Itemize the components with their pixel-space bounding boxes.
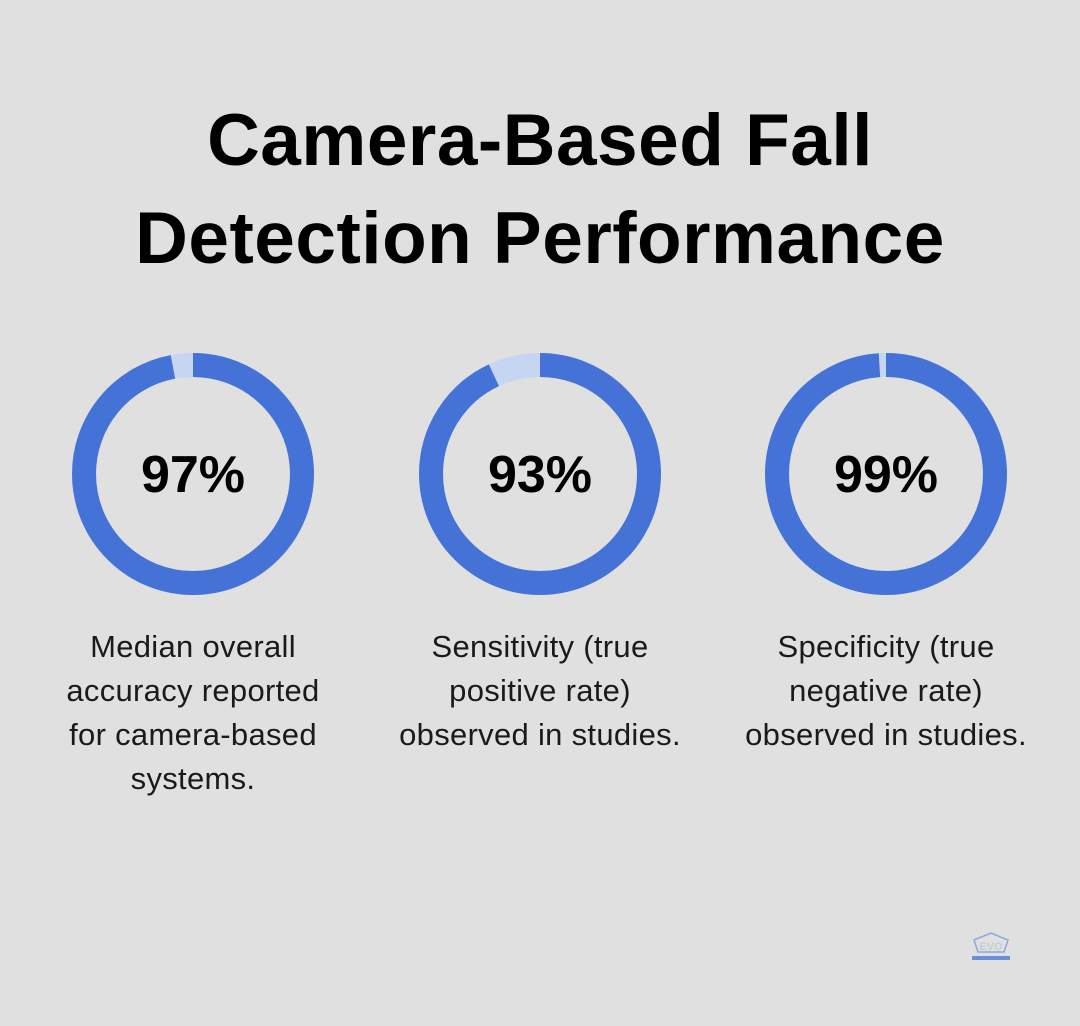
logo: EVO bbox=[979, 941, 1003, 953]
caption: 93%: positive rate) bbox=[449, 673, 631, 708]
donut: 97% bbox=[72, 353, 314, 595]
donut: 99%: 99% bbox=[834, 446, 938, 504]
caption: 93%: observed in studies. bbox=[399, 717, 681, 752]
logo bbox=[972, 932, 1010, 960]
donut: 93% bbox=[419, 353, 661, 595]
caption: 97%: accuracy reported bbox=[66, 673, 320, 708]
title bbox=[135, 100, 945, 279]
donut: 99% bbox=[765, 353, 1007, 595]
caption: 99%: negative rate) bbox=[789, 673, 983, 708]
caption: 97%: for camera-based bbox=[69, 717, 317, 752]
caption: 93% bbox=[399, 629, 681, 752]
caption: 93%: Sensitivity (true bbox=[432, 629, 648, 664]
caption: 99% bbox=[745, 629, 1027, 752]
caption: 97%: systems. bbox=[131, 761, 255, 796]
donut: 97%: 97% bbox=[141, 446, 245, 504]
title: Camera-Based Fall bbox=[207, 100, 873, 181]
caption: 97%: Median overall bbox=[90, 629, 296, 664]
caption: 97% bbox=[66, 629, 320, 796]
caption: 99%: Specificity (true bbox=[778, 629, 994, 664]
title: Detection Performance bbox=[135, 198, 945, 279]
donut: 93%: 93% bbox=[488, 446, 592, 504]
caption: 99%: observed in studies. bbox=[745, 717, 1027, 752]
